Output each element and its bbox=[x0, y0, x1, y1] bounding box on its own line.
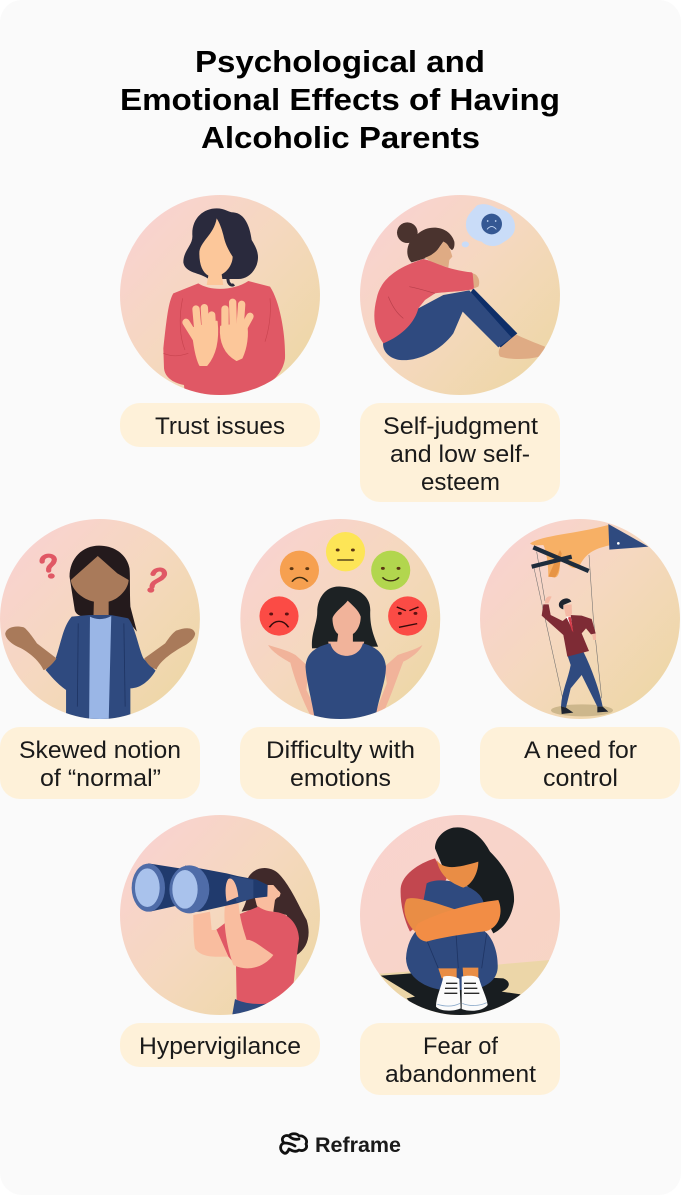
puppet man bbox=[561, 652, 603, 708]
title bbox=[120, 44, 560, 155]
body bbox=[374, 259, 475, 343]
left hand bbox=[186, 308, 217, 365]
label: self-judgment and low self-esteem: Self-judgment bbox=[383, 413, 538, 440]
label: a need for control bbox=[480, 727, 680, 799]
hair back bbox=[435, 827, 514, 933]
binoculars bbox=[185, 866, 268, 912]
jacket bbox=[46, 615, 156, 723]
hand bbox=[530, 525, 611, 577]
woman bbox=[312, 587, 378, 648]
label: fear of abandonment: Fear of bbox=[423, 1033, 498, 1060]
label: fear of abandonment bbox=[360, 1023, 560, 1095]
logo: Reframe bbox=[281, 1134, 401, 1157]
label: a need for control: A need for bbox=[524, 737, 637, 764]
arms bbox=[5, 626, 56, 670]
arms bbox=[404, 898, 455, 932]
title: Psychological and bbox=[195, 44, 485, 79]
label: difficulty with emotions: Difficulty with bbox=[266, 737, 415, 764]
panel: trust issues illustration bbox=[120, 195, 320, 398]
label: self-judgment and low self-esteem: esteem bbox=[421, 469, 500, 496]
panel: skewed notion illustration bbox=[0, 519, 200, 723]
label: difficulty with emotions bbox=[240, 727, 440, 799]
label: hypervigilance bbox=[120, 1023, 320, 1067]
label: skewed notion of normal bbox=[0, 727, 200, 799]
label: trust issues: Trust issues bbox=[155, 413, 285, 440]
shadow bbox=[551, 704, 613, 716]
label: self-judgment and low self-esteem bbox=[360, 403, 560, 502]
control bars bbox=[532, 547, 589, 571]
label: a need for control: control bbox=[543, 765, 618, 792]
title: Emotional Effects of Having bbox=[120, 82, 560, 117]
panel: difficulty with emotions illustration bbox=[240, 519, 440, 723]
question marks bbox=[42, 556, 164, 587]
label: trust issues bbox=[120, 403, 320, 447]
logo: Reframe: Reframe bbox=[315, 1134, 401, 1157]
panel: self-judgment illustration bbox=[360, 195, 560, 395]
thought bubble bbox=[466, 204, 515, 246]
icon: brain bbox=[281, 1134, 307, 1153]
legs bbox=[406, 880, 498, 990]
floor bbox=[379, 960, 550, 1015]
face bbox=[437, 860, 478, 888]
label: fear of abandonment: abandonment bbox=[385, 1061, 536, 1088]
label: self-judgment and low self-esteem: and low self- bbox=[390, 441, 530, 468]
title: Alcoholic Parents bbox=[201, 120, 480, 155]
panel: need for control illustration bbox=[480, 519, 680, 719]
panel: hypervigilance illustration bbox=[120, 815, 320, 1018]
legs bbox=[470, 288, 518, 348]
right hand bbox=[221, 302, 250, 360]
label: hypervigilance: Hypervigilance bbox=[139, 1033, 301, 1060]
strings bbox=[533, 552, 602, 698]
label: difficulty with emotions: emotions bbox=[290, 765, 391, 792]
emoji faces bbox=[259, 532, 427, 636]
shoes bbox=[436, 976, 461, 1011]
label: skewed notion of normal: of “normal” bbox=[40, 765, 161, 792]
panel: fear of abandonment illustration bbox=[360, 815, 560, 1018]
label: skewed notion of normal: Skewed notion bbox=[19, 737, 181, 764]
ankles bbox=[438, 968, 478, 978]
feet bbox=[499, 333, 545, 359]
